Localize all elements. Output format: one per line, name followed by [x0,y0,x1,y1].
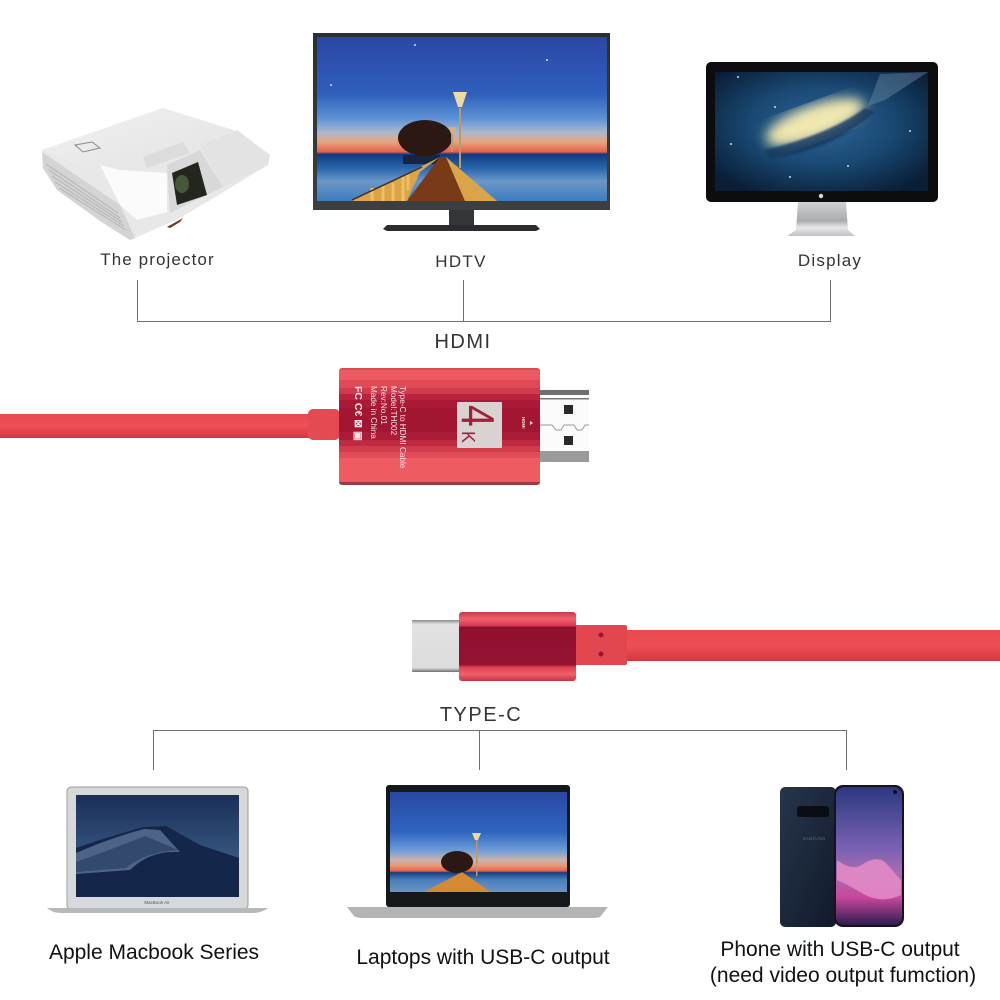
icon: laptop [347,785,608,918]
strain relief [308,409,340,440]
laptop screen [390,792,567,892]
caption: Phone with USB-C output: (need video output fumction) [710,964,976,987]
caption: Apple Macbook Series: Apple Macbook Series [49,941,259,964]
body print: Type-C to HDMI Cable [398,386,407,469]
icon: projector [42,108,270,240]
HDMI cable plug [0,368,589,485]
caption: Phone with USB-C output: Phone with USB-C output [720,938,960,961]
strain relief [574,625,627,665]
caption: Phone with USB-C output [710,938,976,987]
icon: MacBook: MacBook Air [144,900,170,905]
macbook screen [76,795,239,897]
USB Type-C cable plug [412,612,1000,681]
connector lines: TYPE-C [154,730,846,770]
label: HDMI: HDMI [434,331,492,353]
icon: display monitor [706,62,938,236]
4K badge [451,402,503,448]
small HDMI mark [521,417,533,428]
icon: phone [780,785,904,927]
body print: FC C€ ⊠ ▣ [352,386,364,441]
4K badge: K [458,431,478,443]
metal connector [540,389,589,462]
small HDMI mark: HDMI [521,417,526,428]
label: TYPE-C: TYPE-C [440,704,522,726]
body print [352,386,407,469]
connector body [459,612,576,681]
body print: Rev:No.01 [379,386,388,425]
vent side [42,152,135,240]
icon: MacBook [47,787,268,913]
4K badge: 4 [451,405,503,427]
cable [620,630,1000,661]
caption: Laptops with USB-C output: Laptops with USB-C output [356,946,610,969]
cable [0,414,312,438]
display screen [715,72,928,191]
connector body [339,368,540,485]
label: projector: The projector [100,250,215,269]
phone screen [836,787,902,925]
body print: Made in China [369,386,378,439]
body print: Model:TH002 [389,386,398,436]
icon: phone: SAMSUNG [803,836,826,841]
icon: HDTV [313,33,610,231]
label: Display: Display [798,251,862,270]
connector lines: HDMI [138,280,830,322]
metal tip [412,620,460,672]
tv screen [317,37,607,201]
label: HDTV: HDTV [435,252,487,271]
